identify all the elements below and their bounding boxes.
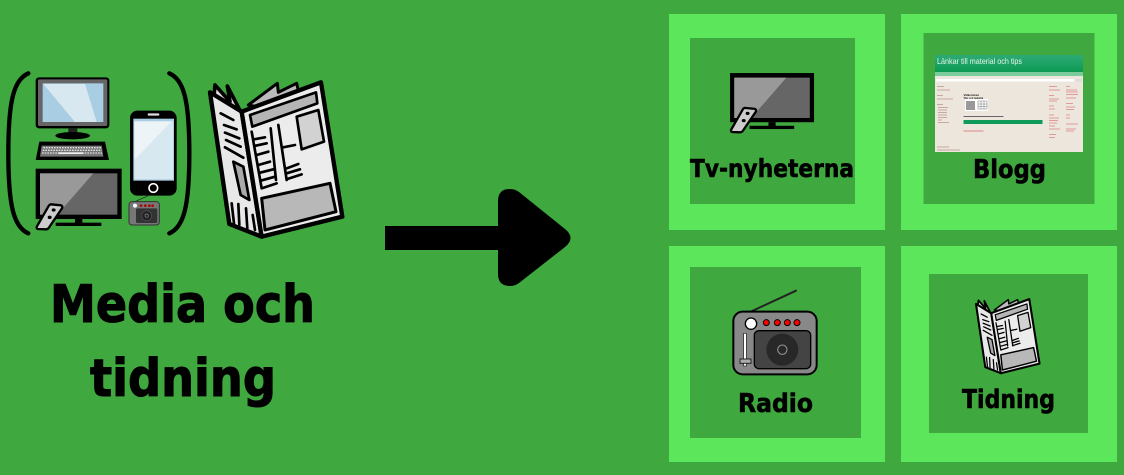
icon: newspaper bbox=[976, 299, 1040, 373]
label: tv-nyheterna: Tv-nyheterna bbox=[690, 154, 854, 183]
panel: media icon group bbox=[8, 73, 342, 237]
heading: media och tidning: Media och bbox=[50, 275, 315, 335]
label: tidning: Tidning bbox=[962, 385, 1055, 415]
panel: tidning bbox=[901, 246, 1117, 462]
arrow bbox=[385, 189, 570, 286]
panel: radio bbox=[669, 246, 885, 462]
screenshot: blog page: Välkommen bbox=[964, 93, 979, 97]
panel: tv-nyheterna bbox=[669, 14, 885, 230]
label: radio: Radio bbox=[738, 389, 813, 419]
icon: desktop computer bbox=[36, 77, 109, 160]
icon: right bracket bbox=[169, 73, 189, 233]
heading: media och tidning bbox=[50, 275, 315, 409]
icon: smartphone bbox=[130, 111, 177, 196]
panel: blogg bbox=[901, 14, 1117, 230]
icon: newspaper bbox=[210, 82, 342, 237]
screenshot: blog page bbox=[935, 55, 1083, 152]
icon: tv bbox=[730, 73, 814, 132]
icon: camera bbox=[129, 196, 159, 225]
icon: left bracket bbox=[8, 73, 28, 233]
heading: media och tidning: tidning bbox=[90, 349, 276, 409]
screenshot: blog page: Tips och material bbox=[964, 97, 983, 100]
icon: television bbox=[36, 169, 122, 229]
icon: radio bbox=[733, 291, 817, 374]
screenshot: blog page: Länkar till material och tips bbox=[937, 57, 1022, 66]
label: blogg: Blogg bbox=[973, 155, 1046, 185]
